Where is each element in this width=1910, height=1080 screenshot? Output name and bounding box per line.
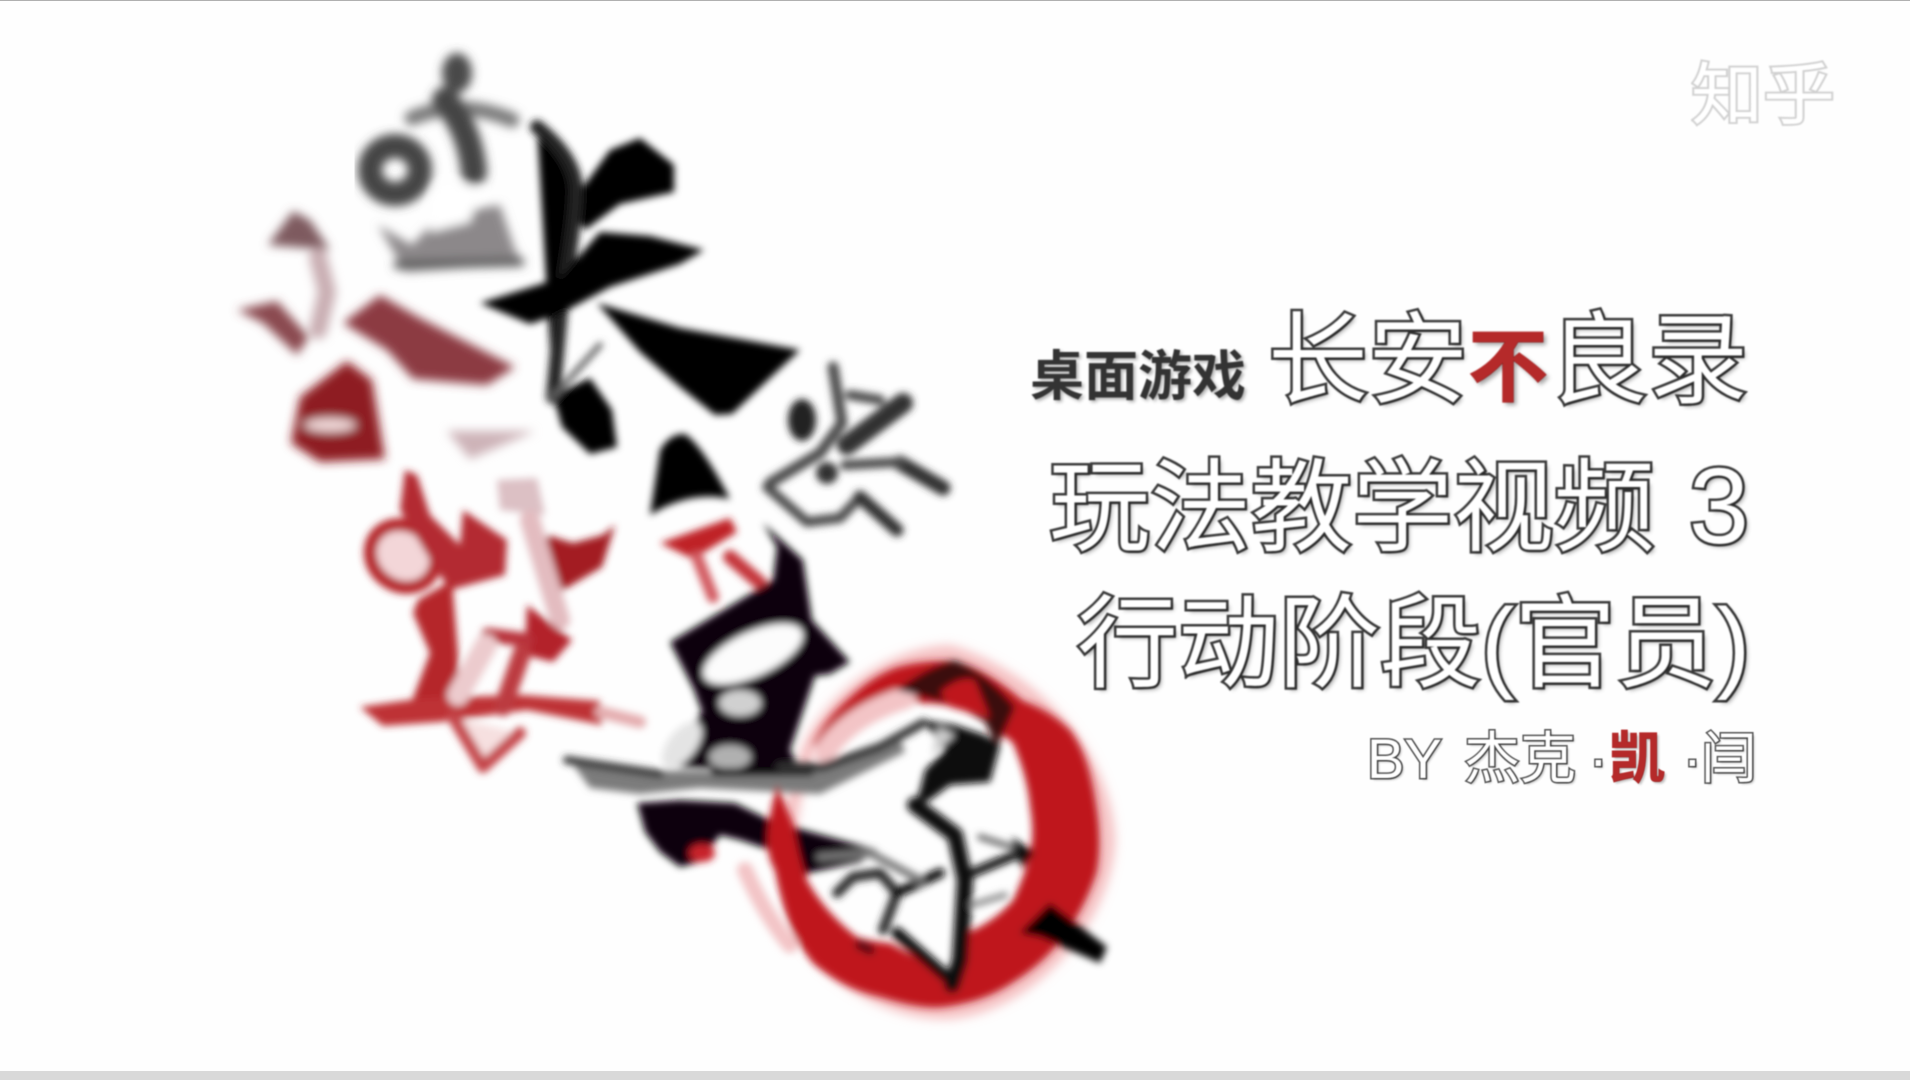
title line 1: 长安不良录 — [1268, 305, 1748, 417]
top edge line — [0, 0, 1910, 1]
author line: BY — [1367, 727, 1442, 790]
logo: soft halo around red ring — [788, 652, 1108, 1012]
author line: 杰克 — [1464, 727, 1576, 790]
logo: red character lower left — [358, 470, 640, 767]
bottom grey bar — [0, 1071, 1910, 1080]
logo: large red ring — [745, 660, 1100, 1008]
logo: black character 录 inside ring — [689, 660, 1107, 985]
title line 2: 玩法教学视频 3 — [1049, 445, 1749, 566]
author line: 闫 — [1701, 727, 1757, 790]
logo: grey small glyph upper — [370, 53, 524, 272]
logo: small black character 安 — [767, 367, 943, 530]
author line: · — [1589, 727, 1608, 790]
logo: red character upper left — [237, 211, 535, 462]
title text block — [1030, 305, 1757, 790]
logo: large black character 长 — [480, 127, 800, 515]
author line: 凯 — [1609, 727, 1665, 790]
watermark: 知乎: 知乎 — [1691, 58, 1835, 133]
author line: · — [1683, 727, 1702, 790]
subtitle: 桌面游戏: 桌面游戏 — [1030, 347, 1246, 407]
logo: small red character 不 — [660, 518, 760, 597]
title line 3: 行动阶段(官员) — [1077, 589, 1750, 701]
author line — [1367, 727, 1757, 790]
logo: black character 良 — [567, 523, 905, 882]
